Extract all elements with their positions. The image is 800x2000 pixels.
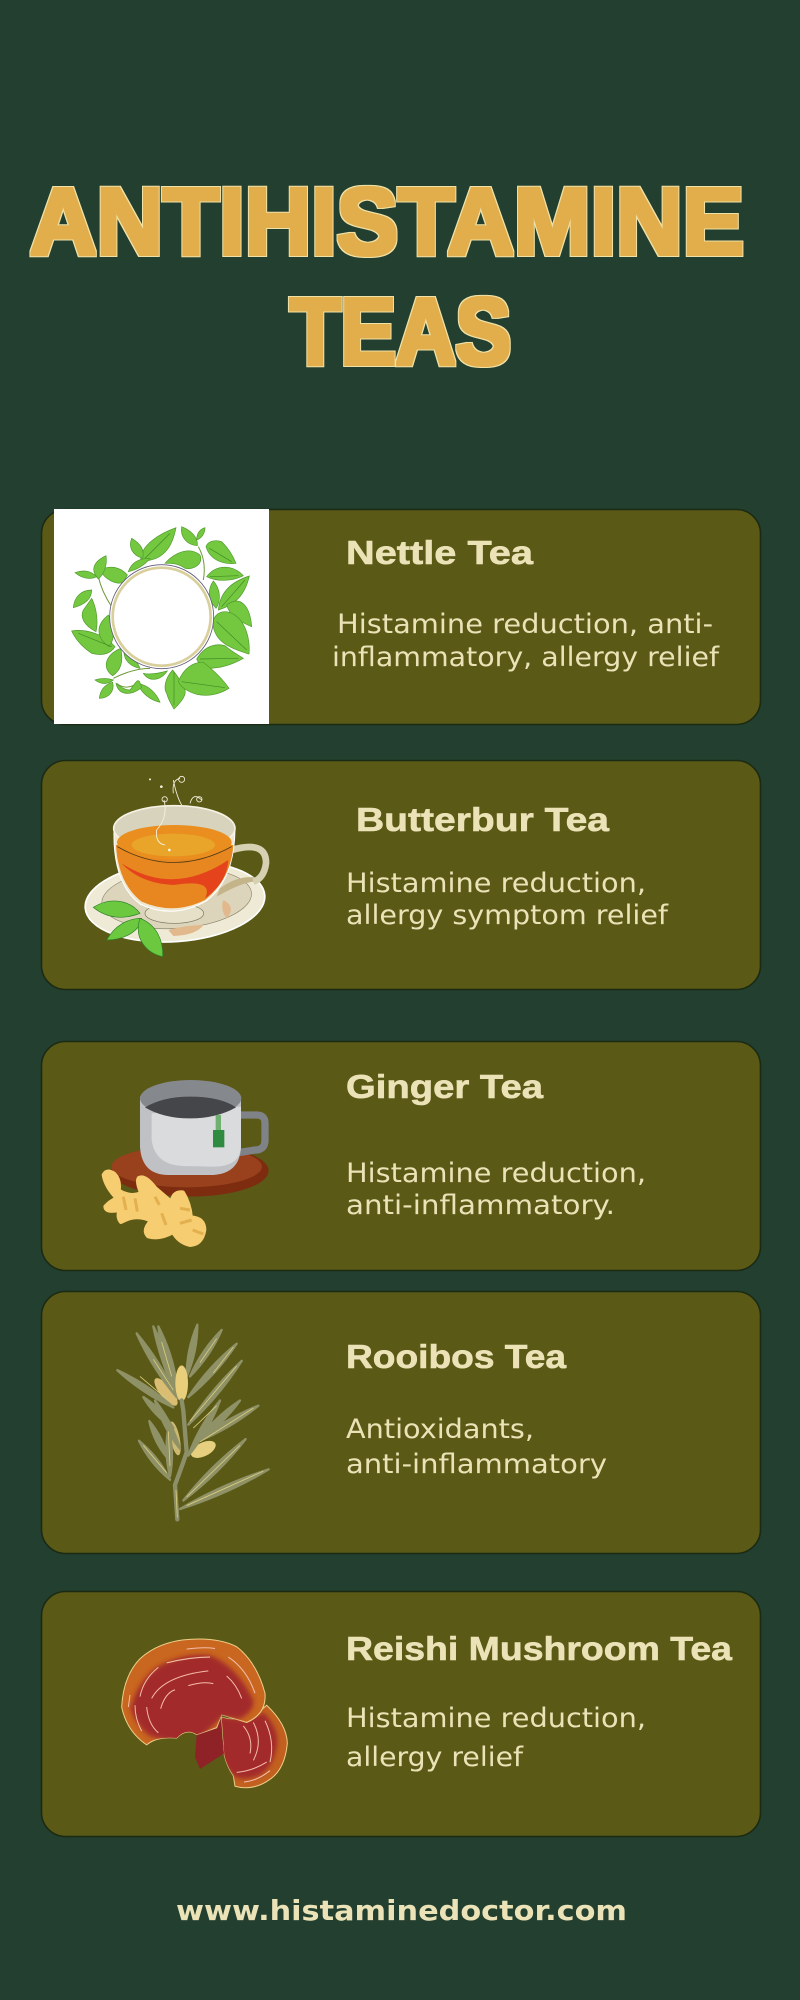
text: butterbur benefits [346, 868, 670, 931]
text: nettle benefits: Histamine reduction, anti- [337, 609, 713, 640]
panel: ginger tea [42, 1042, 760, 1270]
text: rooibos benefits: anti-inflammatory [346, 1449, 607, 1480]
panel: rooibos tea [42, 1292, 760, 1554]
heading: ginger tea: Ginger Tea [346, 1068, 544, 1105]
text: nettle benefits: inflammatory, allergy relief [332, 642, 721, 673]
text: butterbur benefits: allergy symptom relief [346, 900, 670, 931]
text: ginger benefits: Histamine reduction, [346, 1158, 646, 1189]
icon: rooibos sprig [117, 1325, 269, 1519]
footer website: www.histaminedoctor.com [176, 1894, 627, 1927]
text: ginger benefits: anti-inflammatory. [346, 1190, 615, 1221]
icon: nettle leaf wreath [54, 509, 269, 724]
panel: reishi mushroom tea [42, 1592, 760, 1836]
icon: teacup on saucer [82, 776, 268, 957]
text: rooibos benefits: Antioxidants, [346, 1414, 534, 1445]
heading: rooibos tea: Rooibos Tea [346, 1338, 567, 1375]
title: ANTIHISTAMINE [30, 169, 744, 275]
icon: reishi mushroom [122, 1639, 287, 1788]
text: reishi benefits: allergy relief [346, 1742, 525, 1773]
panel: butterbur tea [42, 760, 760, 990]
title: TEAS [290, 279, 511, 385]
panel: nettle tea [42, 509, 760, 724]
heading: reishi mushroom tea: Reishi Mushroom Tea [346, 1630, 733, 1667]
text: ginger benefits [346, 1158, 646, 1221]
heading: butterbur tea: Butterbur Tea [356, 801, 610, 838]
text: reishi benefits [346, 1703, 646, 1773]
title [30, 169, 744, 385]
text: rooibos benefits [346, 1414, 607, 1480]
icon: mug and ginger root [104, 1080, 269, 1245]
heading: nettle tea: Nettle Tea [346, 534, 534, 571]
text: butterbur benefits: Histamine reduction, [346, 868, 646, 899]
text: reishi benefits: Histamine reduction, [346, 1703, 646, 1734]
text: nettle benefits [332, 609, 721, 673]
